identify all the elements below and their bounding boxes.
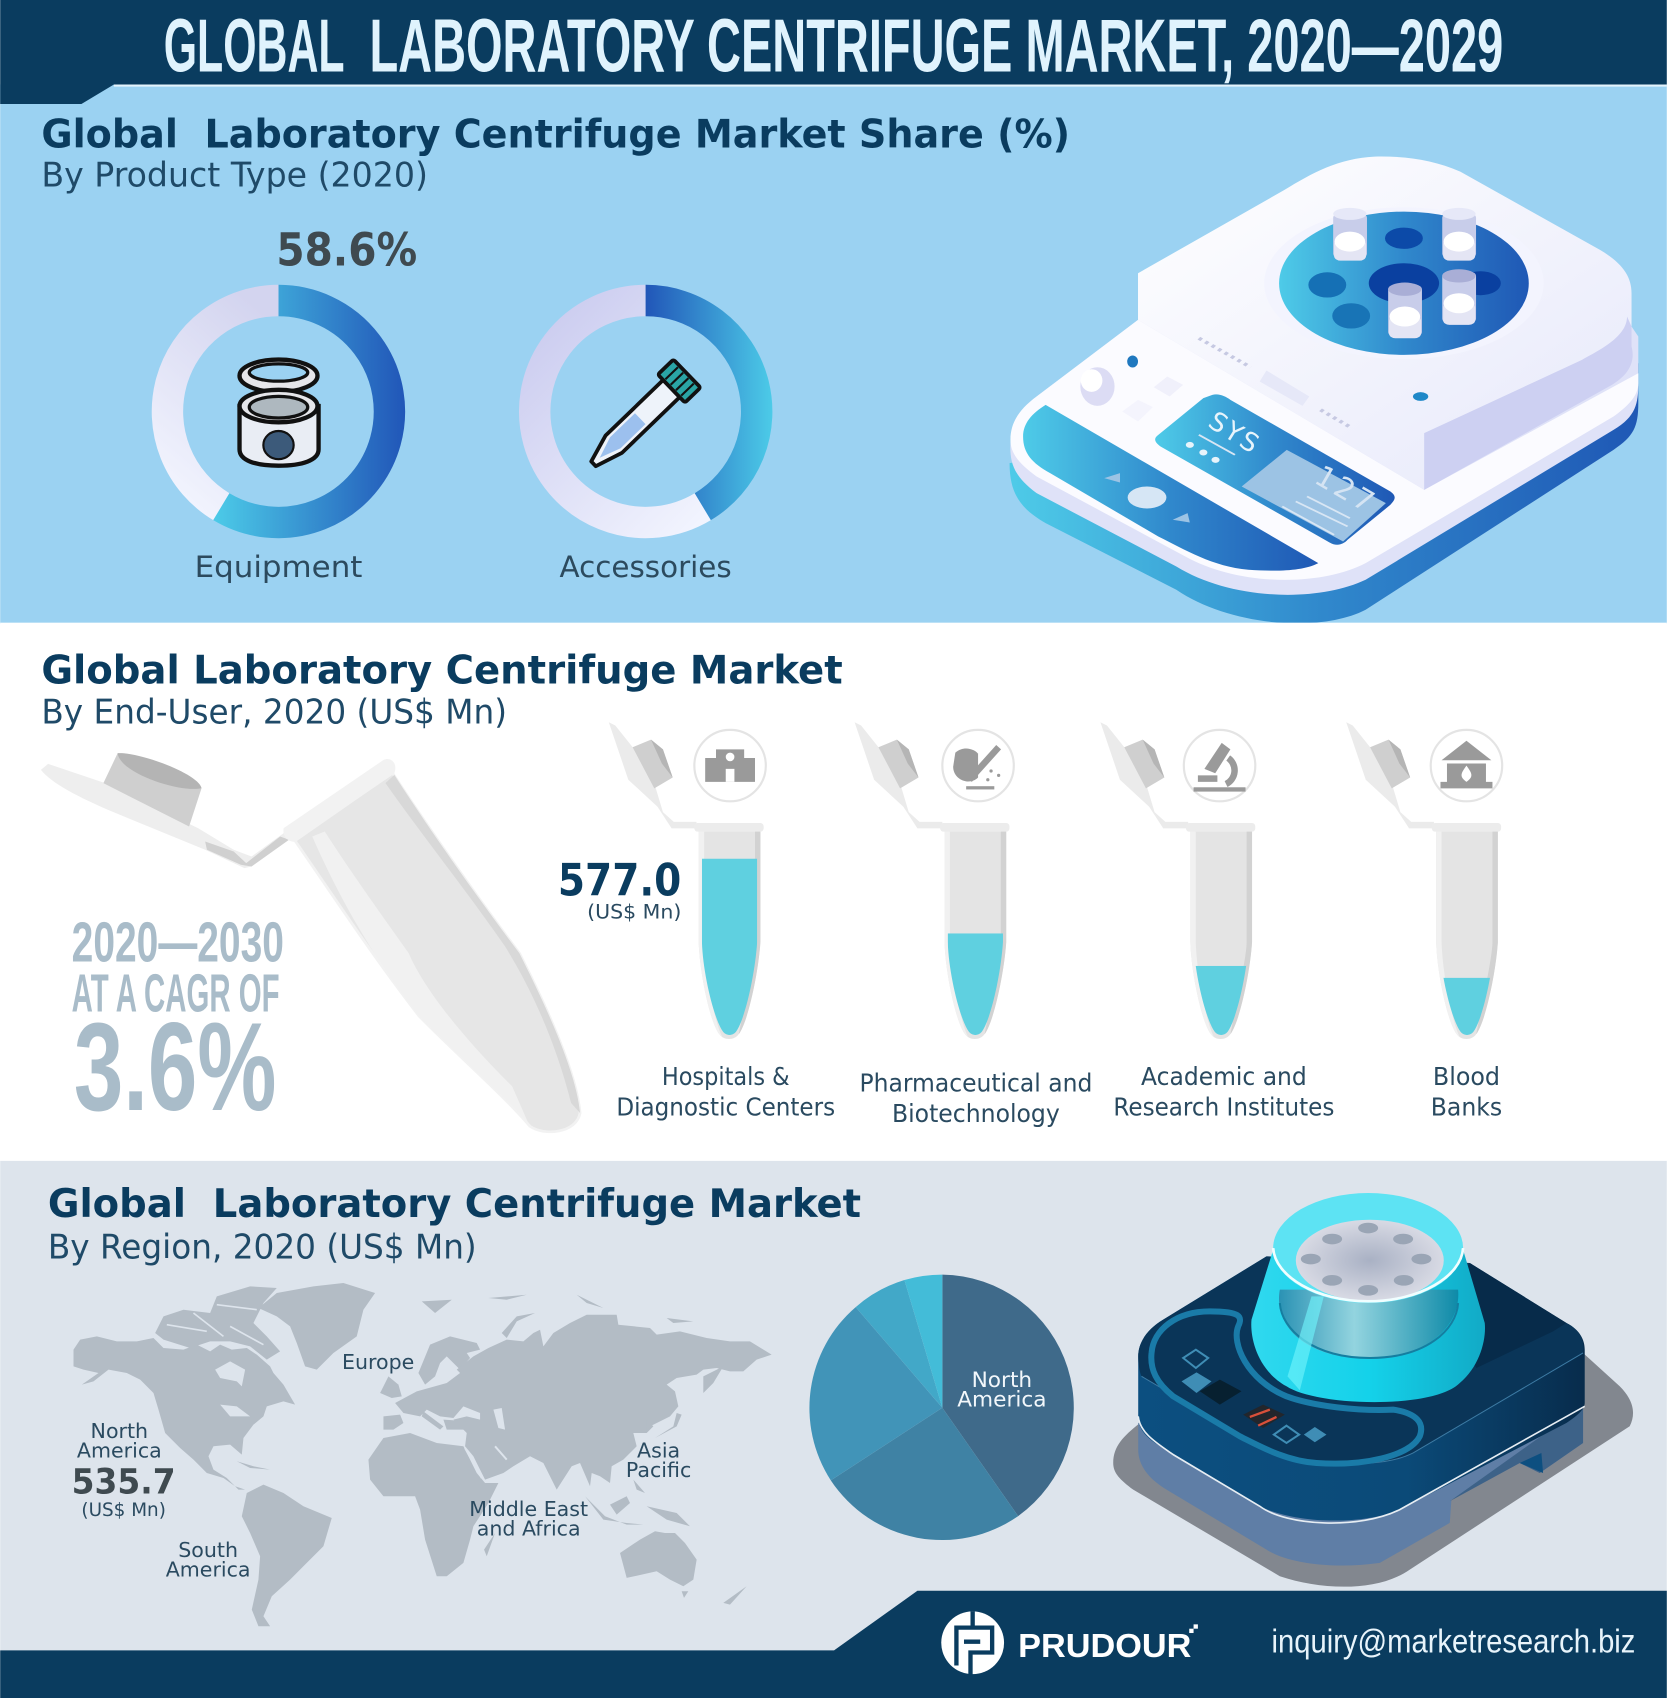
label: Middle East and Africa: and Africa xyxy=(477,1517,581,1541)
tube: pharmaceutical xyxy=(855,722,1092,1128)
footer banner xyxy=(0,1591,1667,1698)
subheading: end-user: By End-User, 2020 (US$ Mn) xyxy=(41,692,507,731)
heading: region market: Global Laboratory Centrifuge Market xyxy=(48,1182,861,1227)
unit: North America: (US$ Mn) xyxy=(81,1500,166,1521)
label: blood banks: Banks xyxy=(1431,1092,1502,1121)
icon: centrifuge xyxy=(240,360,319,466)
subheading: region: By Region, 2020 (US$ Mn) xyxy=(48,1227,477,1266)
label: blood banks: Blood xyxy=(1433,1062,1500,1091)
label: North America: America xyxy=(77,1439,162,1463)
panel: end-user xyxy=(0,623,1667,1162)
heading: end-user market: Global Laboratory Centrifuge Market xyxy=(41,648,843,693)
illustration: benchtop centrifuge xyxy=(1010,157,1638,623)
label: hospitals: Hospitals & xyxy=(662,1062,790,1091)
label: Asia Pacific: Pacific xyxy=(626,1458,691,1482)
label: accessories: Accessories xyxy=(560,550,732,584)
text: SYS: SYS xyxy=(1203,406,1266,461)
label: equipment: Equipment xyxy=(195,550,362,584)
pie label: America xyxy=(957,1388,1047,1413)
CAGR caption: AT A CAGR OF xyxy=(72,963,280,1023)
value: equipment share: 58.6% xyxy=(276,223,417,276)
panel: product type share xyxy=(0,84,1667,624)
illustration: large tube xyxy=(41,753,580,1132)
unit: hospitals: (US$ Mn) xyxy=(587,900,681,923)
value: North America: 535.7 xyxy=(72,1462,176,1502)
panel: region xyxy=(0,1161,1667,1698)
CAGR years: 2020—2030 xyxy=(72,911,284,974)
header banner xyxy=(0,0,1667,104)
label: Middle East and Africa: Middle East xyxy=(469,1497,588,1521)
donut: equipment xyxy=(167,301,389,523)
CAGR value: 3.6% xyxy=(74,996,276,1137)
pie chart xyxy=(809,1275,1074,1540)
label: South America: South xyxy=(178,1538,238,1562)
label: pharmaceutical: Biotechnology xyxy=(892,1099,1060,1128)
pie label: North xyxy=(972,1368,1032,1393)
logo wordmark: PRUDOUR xyxy=(1018,1628,1191,1665)
text: 127: 127 xyxy=(1309,459,1383,521)
value: hospitals: 577.0 xyxy=(558,856,681,907)
illustration: dark centrifuge xyxy=(1113,1193,1633,1587)
callout: CAGR xyxy=(72,911,284,1137)
label: South America: America xyxy=(166,1558,251,1582)
label: pharmaceutical: Pharmaceutical and xyxy=(859,1069,1092,1098)
logo mark xyxy=(941,1611,1004,1675)
heading: market share: Global Laboratory Centrifuge Market Share (%) xyxy=(41,112,1070,157)
icon: blood bank xyxy=(1431,730,1502,801)
tube: hospitals xyxy=(558,722,835,1121)
label: Europe: Europe xyxy=(342,1350,414,1374)
donut: accessories xyxy=(535,301,757,523)
label: hospitals: Diagnostic Centers xyxy=(616,1092,835,1121)
icon: test tube xyxy=(580,360,701,478)
icon: hospital xyxy=(694,730,766,801)
label: North America: North xyxy=(91,1419,148,1443)
label: Asia Pacific: Asia xyxy=(637,1439,680,1463)
tube: academic xyxy=(1100,722,1334,1121)
label: academic: Academic and xyxy=(1141,1062,1307,1091)
subheading: product type: By Product Type (2020) xyxy=(41,155,428,194)
icon: microscope xyxy=(1184,730,1255,801)
world map xyxy=(74,1283,772,1626)
title: GLOBAL xyxy=(164,3,345,87)
tube: blood banks xyxy=(1346,722,1507,1121)
label: academic: Research Institutes xyxy=(1113,1092,1334,1121)
icon: pharma xyxy=(942,730,1014,801)
